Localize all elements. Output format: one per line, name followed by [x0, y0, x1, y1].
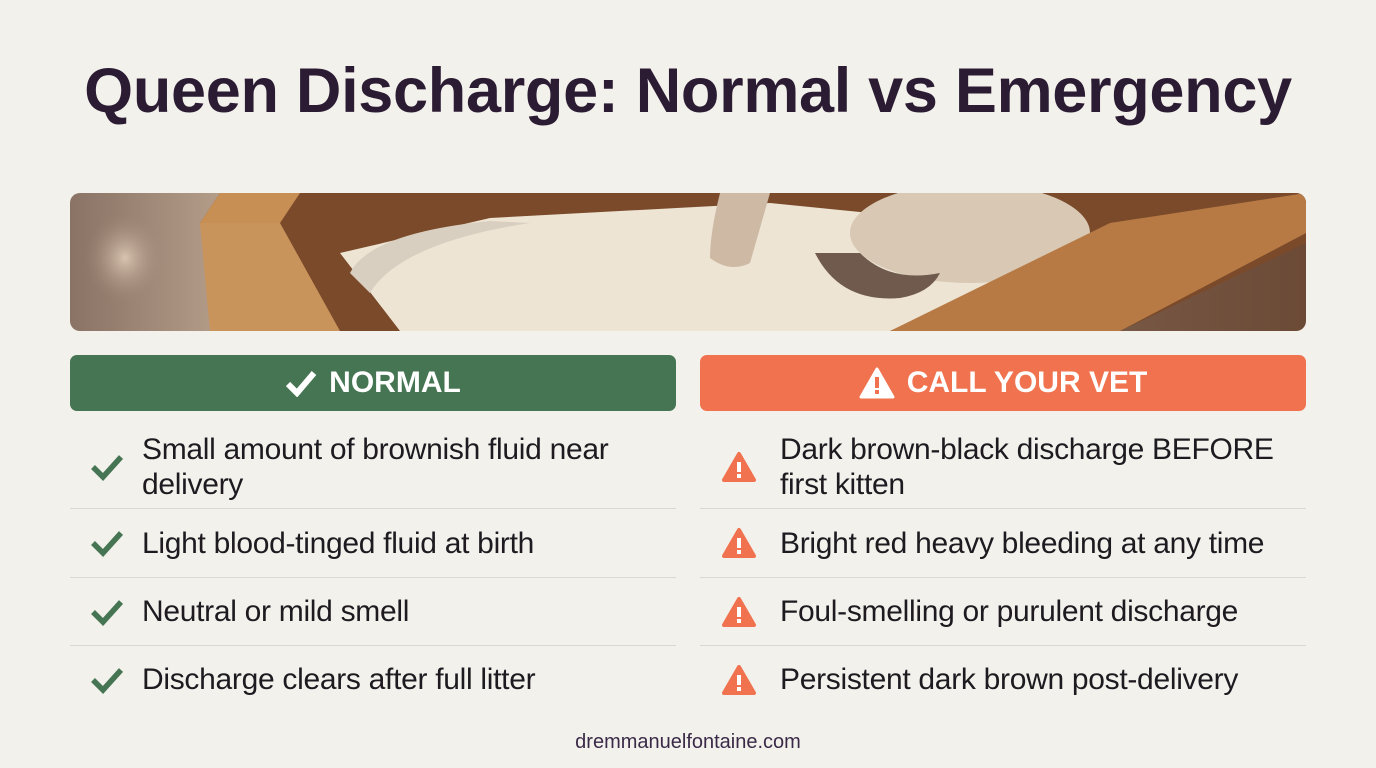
item: first kitten [780, 468, 905, 501]
header: normal: NORMAL [329, 366, 461, 399]
item: Dark brown-black discharge BEFORE [780, 433, 1274, 466]
item: Foul-smelling or purulent discharge [780, 595, 1238, 628]
item: Discharge clears after full litter [142, 663, 535, 696]
header: call your vet [700, 355, 1306, 411]
item [722, 433, 1274, 501]
title: Queen Discharge: Normal vs Emergency [84, 56, 1292, 126]
footer url: dremmanuelfontaine.com [575, 731, 801, 753]
item [91, 433, 608, 501]
item: Small amount of brownish fluid near [142, 433, 608, 466]
item: Persistent dark brown post-delivery [780, 663, 1238, 696]
item: delivery [142, 468, 243, 501]
list: emergency signs [700, 433, 1306, 696]
header: call your vet: CALL YOUR VET [907, 366, 1147, 399]
list: normal signs [70, 433, 676, 696]
header: normal [70, 355, 676, 411]
item: Neutral or mild smell [142, 595, 409, 628]
item: Bright red heavy bleeding at any time [780, 526, 1264, 560]
illustration: cat in whelping box [70, 193, 1306, 331]
item: Light blood-tinged fluid at birth [142, 526, 534, 560]
